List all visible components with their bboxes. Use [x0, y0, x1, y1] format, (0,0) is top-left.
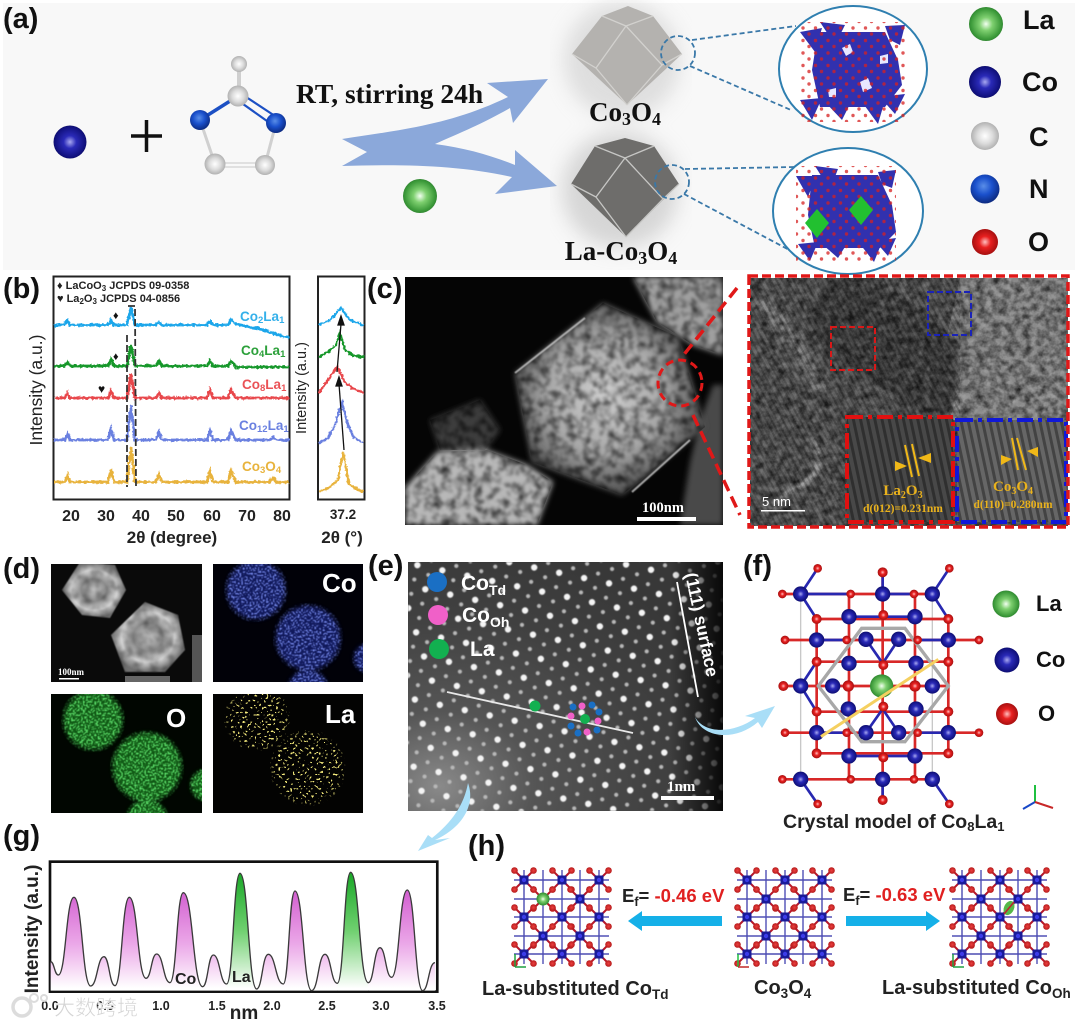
STEM image of particle	[405, 277, 723, 525]
caption middle: 4	[804, 986, 812, 1001]
series labels: La	[268, 418, 284, 433]
inset La2O3	[847, 417, 953, 522]
peak labels	[175, 969, 251, 988]
panel label h: (h)	[468, 830, 505, 862]
x axis ticks: 40	[132, 508, 150, 525]
icon: lanthanum ion sphere	[403, 179, 437, 213]
surface annotation: (111) surface	[681, 571, 723, 679]
zoom connector lines	[682, 288, 740, 515]
crystal circle La-Co3O4	[773, 148, 923, 274]
XRD legend: O	[84, 293, 93, 305]
label La-Co3O4: 4	[668, 248, 677, 268]
caption: 1	[997, 819, 1004, 834]
caption middle: 3	[781, 986, 789, 1001]
caption: Crystal model of Co	[783, 811, 967, 833]
x axis ticks	[62, 508, 291, 525]
x ticks: 0.5	[96, 999, 114, 1013]
panel d: elemental mapping	[4, 557, 363, 813]
XRD legend: 3	[102, 284, 107, 293]
inset La2O3: 3	[918, 490, 923, 501]
arrow left	[628, 911, 722, 931]
peak labels: La	[232, 969, 251, 986]
zoomed y title: Intensity (a.u.)	[294, 342, 310, 434]
panel label c: (c)	[367, 273, 402, 305]
XRD legend: ♦ LaCoO	[57, 280, 102, 292]
caption: La	[974, 811, 997, 833]
x axis title: 2θ (degree)	[127, 528, 217, 547]
series labels: 1	[280, 349, 286, 360]
peak markers	[98, 310, 119, 396]
lattice legend: Oh	[490, 614, 509, 630]
map: La: La	[325, 699, 356, 729]
scale bar 100 nm: 100nm	[642, 500, 684, 516]
legend: La	[1036, 591, 1062, 616]
lattice legend: Td	[489, 582, 506, 598]
formation energy left: f	[634, 895, 639, 909]
icon: La-Co3O4 polyhedron	[571, 138, 679, 237]
zoomed tick label: 37.2	[330, 507, 356, 522]
map: La	[213, 685, 363, 813]
arrow: to line profile	[418, 783, 470, 851]
XRD traces	[54, 308, 289, 482]
x ticks: 2.5	[318, 999, 336, 1013]
pink filled peaks	[50, 890, 435, 991]
XRD plot frame	[54, 276, 290, 500]
lattice: pristine Co3O4	[734, 867, 835, 967]
caption left: La-substituted Co	[482, 978, 652, 1000]
series labels: Co	[241, 343, 259, 358]
x ticks: 3.0	[372, 999, 390, 1013]
caption: 8	[967, 819, 974, 834]
y title: Intensity (a.u.)	[22, 865, 43, 993]
label Co3O4: Co	[589, 97, 622, 127]
scale bar 5 nm: 5 nm	[762, 494, 791, 509]
panel c: electron micrographs	[367, 273, 1068, 527]
series labels: La	[263, 309, 280, 324]
lattice legend: Co	[462, 604, 490, 627]
formation energy left: =	[639, 885, 654, 906]
label La-Co3O4: 3	[638, 248, 647, 268]
atomic lattice image	[408, 562, 723, 811]
lattice: La at Td site	[511, 867, 612, 967]
legend: O	[1038, 701, 1055, 726]
x ticks: 1.5	[208, 999, 226, 1013]
peak markers: ♥	[98, 382, 105, 396]
reaction condition text: RT, stirring 24h	[296, 78, 483, 109]
panel e: atomic resolution image	[368, 550, 775, 851]
label La-Co3O4: O	[647, 236, 668, 266]
formation energy left: -0.46 eV	[654, 885, 725, 906]
inset Co3O4: 3	[1011, 486, 1016, 497]
axes triad	[1023, 785, 1053, 809]
caption right: La-substituted Co	[882, 977, 1052, 999]
XRD legend: ♥ La	[57, 293, 79, 305]
map: O	[51, 694, 202, 813]
series labels: La	[265, 377, 282, 392]
panel a background	[3, 3, 1075, 270]
x ticks: 0.0	[41, 999, 59, 1013]
zoomed XRD traces	[319, 308, 364, 492]
zoomed XRD frame	[318, 276, 364, 500]
map: HAADF image	[51, 562, 202, 684]
zoom callout Co3O4 dashed circle and lines	[661, 26, 796, 110]
panel label g: (g)	[3, 820, 40, 852]
scale bar 1 nm: 1nm	[667, 779, 696, 795]
panel label f: (f)	[743, 550, 772, 582]
panel g: intensity line profile	[3, 820, 446, 1024]
red dashed crescent on particle	[658, 360, 702, 406]
icon: cobalt ion sphere	[54, 126, 86, 158]
icon: imidazole molecule	[190, 56, 286, 175]
map: O: O	[166, 703, 186, 733]
legend: Co	[1036, 647, 1065, 672]
legend: elements: La	[1023, 5, 1055, 35]
x axis ticks: 60	[203, 508, 221, 525]
arrow right	[846, 911, 940, 931]
peak labels: Co	[175, 971, 197, 988]
soft shadows behind polyhedra	[562, 2, 680, 248]
formation energy right: =	[860, 884, 875, 905]
panel label d: (d)	[3, 553, 40, 585]
oxygen atoms	[778, 564, 983, 808]
label La-Co3O4: La-Co	[565, 236, 638, 266]
series labels: 1	[279, 315, 285, 326]
peak markers: ♦	[113, 351, 119, 363]
crystal circle Co3O4	[779, 6, 927, 132]
x axis ticks: 50	[167, 508, 185, 525]
legend	[992, 590, 1065, 726]
formation energy left: E	[622, 885, 634, 906]
lattice legend: La	[470, 638, 495, 661]
panel label a: (a)	[3, 3, 38, 35]
series labels: 4	[259, 349, 265, 360]
caption middle: O	[788, 977, 804, 999]
panel label e: (e)	[368, 550, 403, 582]
series labels: 1	[283, 424, 289, 435]
caption right: Oh	[1052, 986, 1071, 1001]
x axis ticks: 80	[273, 508, 291, 525]
series labels: 12	[257, 424, 268, 435]
series labels: O	[265, 459, 276, 474]
series labels: 2	[258, 315, 263, 326]
trend arrows	[336, 316, 344, 450]
crystal structure	[778, 564, 983, 808]
panel h: formation energies	[468, 830, 1071, 1002]
inset Co3O4: O	[1016, 479, 1028, 495]
scale bar 100 nm	[637, 500, 696, 521]
legend: elements: C	[1029, 122, 1048, 152]
x title: nm	[230, 1003, 258, 1024]
scale bar 5 nm	[761, 494, 805, 512]
series labels: 4	[276, 465, 282, 476]
panel label b: (b)	[3, 273, 40, 305]
series labels: Co	[242, 377, 260, 392]
series labels: Co	[242, 459, 260, 474]
lanthanum atom	[870, 674, 893, 698]
legend: elements	[969, 5, 1058, 257]
map: Co	[213, 564, 363, 682]
caption left: Td	[652, 987, 668, 1002]
profile plot	[50, 862, 437, 992]
watermark	[13, 994, 138, 1020]
x ticks	[41, 999, 446, 1013]
green filled peaks	[226, 873, 368, 991]
caption middle: Co	[754, 977, 781, 999]
formation energy right: E	[843, 884, 855, 905]
x axis ticks: 30	[97, 508, 115, 525]
cobalt atoms	[793, 586, 956, 787]
x ticks: 3.5	[428, 999, 446, 1013]
scale bar 1 nm	[661, 779, 714, 800]
series labels: 1	[281, 383, 287, 394]
gray hexagon	[818, 628, 948, 742]
panel a: synthesis scheme	[3, 2, 1075, 274]
XRD legend: JCPDS 04-0856	[97, 293, 180, 305]
line profile marker	[447, 692, 633, 733]
lattice legend	[427, 572, 509, 661]
panel f: crystal model	[743, 550, 1065, 834]
profile line	[51, 872, 435, 991]
legend: elements: Co	[1022, 67, 1058, 97]
outer red dashed frame	[749, 276, 1068, 527]
watermark: 大数跨境	[54, 997, 138, 1020]
lattice: La at Oh site	[949, 867, 1050, 967]
x axis ticks: 20	[62, 508, 80, 525]
inset Co3O4: Co	[993, 479, 1011, 495]
plus sign	[131, 120, 162, 152]
formation energy right: f	[855, 894, 860, 908]
XRD legend	[57, 280, 189, 306]
series labels: La	[264, 343, 281, 358]
HRTEM image	[750, 278, 1068, 526]
inset Co3O4	[957, 420, 1066, 522]
yellow plane line	[821, 659, 938, 737]
y axis title: Intensity (a.u.)	[26, 335, 46, 445]
inset Co3O4: d(110)=0.280nm	[973, 499, 1053, 511]
formation energy right: -0.63 eV	[875, 884, 946, 905]
series labels: 8	[260, 383, 265, 394]
XRD legend: 2	[79, 297, 84, 306]
red dashed selection box	[831, 327, 875, 370]
x ticks: 2.0	[263, 999, 281, 1013]
legend: elements: O	[1028, 227, 1049, 257]
inset Co3O4: 4	[1028, 486, 1033, 497]
dashed guide box at 37 degrees	[127, 306, 136, 487]
series labels: Co	[239, 418, 257, 433]
label Co3O4: 3	[622, 109, 631, 129]
atom overlay dots	[530, 700, 602, 736]
icon: Co3O4 polyhedron	[572, 6, 682, 105]
x ticks: 1.0	[152, 999, 170, 1013]
label Co3O4: 4	[652, 109, 661, 129]
XRD legend: JCPDS 09-0358	[106, 280, 189, 292]
zoom callout La-Co3O4 dashed circle and lines	[655, 165, 794, 252]
blue dashed selection box	[928, 292, 971, 335]
label Co3O4: O	[631, 97, 652, 127]
inset La2O3: d(012)=0.231nm	[863, 503, 943, 515]
arrow: to crystal model	[695, 706, 775, 735]
series labels	[239, 309, 289, 476]
map: Co: Co	[322, 568, 357, 598]
arrow: forked reaction arrow	[342, 79, 557, 194]
lattice legend: Co	[461, 572, 489, 595]
inset La2O3: 2	[901, 490, 906, 501]
inset La2O3: La	[883, 483, 901, 499]
map: HAADF image: 100nm	[58, 667, 85, 677]
x axis ticks: 70	[238, 508, 256, 525]
XRD legend: 3	[92, 297, 97, 306]
series labels: Co	[240, 309, 258, 324]
zoomed x title: 2θ (°)	[321, 528, 363, 547]
legend: elements: N	[1029, 174, 1048, 204]
peak markers: ♦	[113, 310, 119, 322]
inset La2O3: O	[906, 483, 918, 499]
panel b: XRD patterns	[3, 273, 364, 547]
series labels: 3	[260, 465, 265, 476]
